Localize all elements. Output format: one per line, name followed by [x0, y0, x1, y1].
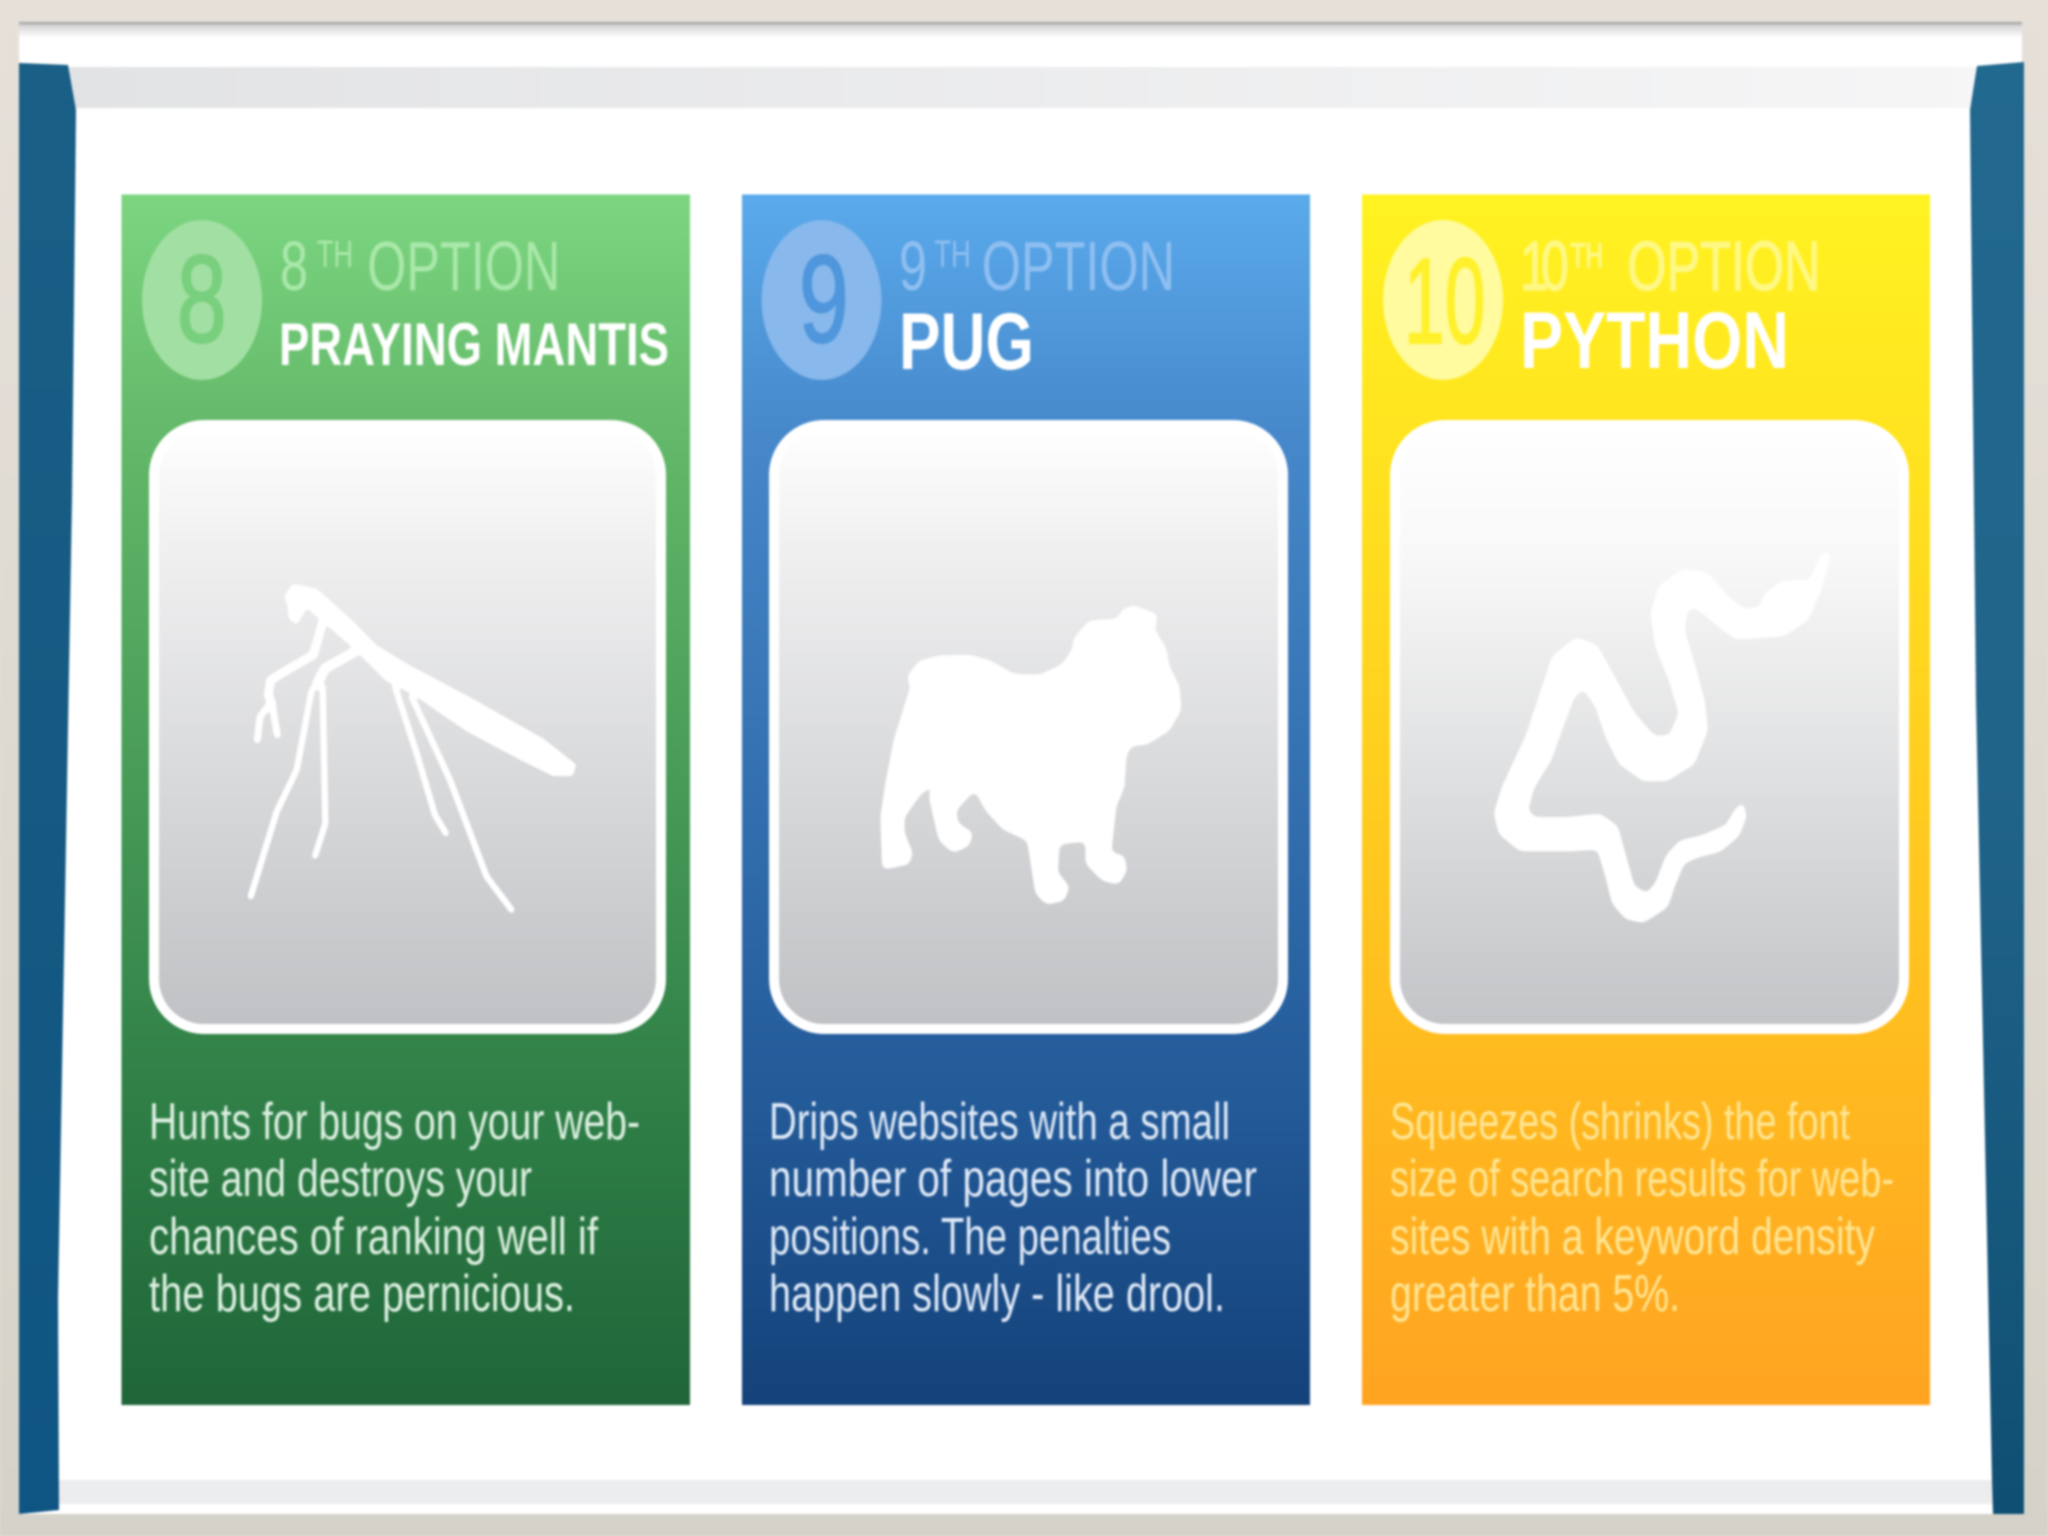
number badge 10 — [1383, 220, 1503, 380]
option label: OPTION — [367, 227, 560, 305]
option label: OPTION — [982, 227, 1175, 305]
panel: praying mantis: chances of ranking well if — [149, 1208, 598, 1266]
option label: 8 — [280, 227, 308, 305]
number badge 8: 8 — [177, 230, 227, 368]
option label: TH — [1570, 237, 1610, 275]
description: Squeezes (shrinks) the font — [1390, 1093, 1850, 1151]
option name: PRAYING MANTIS — [279, 311, 669, 378]
panel: praying mantis: site and destroys your — [149, 1150, 532, 1208]
description: Drips websites with a small — [769, 1093, 1230, 1151]
panel: pug: happen slowly - like drool. — [769, 1265, 1225, 1323]
option label: TH — [934, 234, 978, 276]
option label: OPTION — [1627, 227, 1820, 305]
panel: praying mantis — [122, 194, 690, 1405]
panel: praying mantis: the bugs are pernicious. — [149, 1265, 575, 1323]
number badge 8 — [142, 220, 262, 380]
image panel — [1395, 425, 1904, 1029]
right blue bar — [1970, 62, 2024, 1514]
number badge 10: 10 — [1404, 234, 1485, 370]
image panel — [154, 425, 661, 1029]
option label: TH — [317, 234, 361, 276]
panel: python — [1362, 194, 1930, 1405]
panel: pug: positions. The penalties — [769, 1208, 1171, 1266]
option name: PYTHON — [1520, 296, 1789, 386]
icon: python silhouette — [1495, 553, 1830, 922]
option label: 10 — [1520, 227, 1567, 305]
icon: pug silhouette — [882, 607, 1180, 903]
panel: python: sites with a keyword density — [1390, 1208, 1875, 1266]
panel: pug: number of pages into lower — [769, 1150, 1257, 1208]
option name: PUG — [899, 297, 1034, 387]
icon: mantis silhouette — [251, 585, 575, 910]
panel: pug — [742, 194, 1310, 1405]
left blue bar — [19, 63, 76, 1514]
panel: python: greater than 5%. — [1390, 1265, 1680, 1323]
option label: 9 — [899, 227, 927, 305]
number badge 9 — [762, 220, 882, 380]
number badge 9: 9 — [799, 230, 849, 368]
description: Hunts for bugs on your web- — [149, 1093, 640, 1151]
image panel — [774, 425, 1283, 1029]
